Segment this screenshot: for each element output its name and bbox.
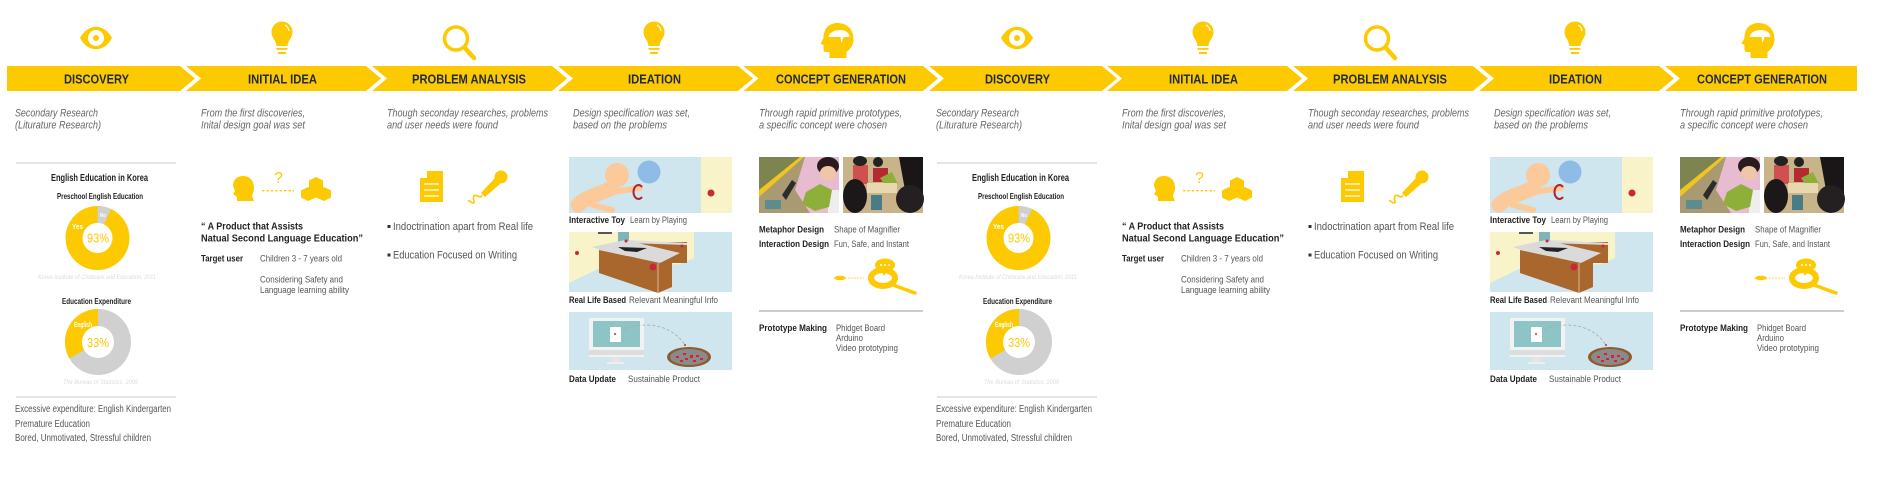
icon: magnifier bbox=[1366, 27, 1395, 58]
intro text: problem analysis bbox=[387, 108, 548, 132]
subheading: preschool English education: Preschool English Education bbox=[57, 191, 143, 201]
label: data update: Sustainable Product bbox=[1549, 374, 1621, 384]
intro text: discovery: (Liturature Research) bbox=[15, 120, 101, 132]
findings list: discovery: Premature Education bbox=[936, 419, 1011, 430]
quote: “ A Product that Assists bbox=[1122, 220, 1224, 232]
panel: discovery bbox=[936, 108, 1097, 444]
target user: Language learning ability bbox=[1181, 285, 1270, 295]
heading: ideation: IDEATION bbox=[1549, 72, 1602, 86]
icon: child question product: ? bbox=[274, 170, 283, 187]
label: real life based: Relevant Meaningful Info bbox=[629, 295, 718, 305]
design details: Shape of Magnifier bbox=[1755, 225, 1821, 235]
intro text: problem analysis: Though seconday researches, problems bbox=[1308, 108, 1469, 120]
process chevron bar bbox=[7, 66, 1857, 91]
intro text: ideation: Design specification was set, bbox=[1494, 108, 1611, 120]
intro text: initial idea: From the first discoveries, bbox=[201, 108, 305, 120]
prototype making: Phidget Board bbox=[1757, 323, 1806, 333]
intro text: concept generation bbox=[1680, 108, 1823, 132]
findings list: discovery: Excessive expenditure: English Kindergarten bbox=[15, 404, 171, 415]
target user bbox=[201, 254, 349, 295]
heading: concept generation: CONCEPT GENERATION bbox=[776, 72, 906, 86]
icon: document and microphone bbox=[1341, 170, 1428, 203]
illustration: kitchen room bbox=[569, 232, 732, 293]
source: preschool: Korea Institute of Childcare and Education, 2011 bbox=[959, 274, 1077, 281]
prototype making bbox=[759, 323, 898, 353]
icon: head concept generation bbox=[820, 23, 854, 58]
subheading: education expenditure: Education Expenditure bbox=[983, 296, 1052, 306]
findings list: discovery: Bored, Unmotivated, Stressful children bbox=[936, 433, 1072, 444]
icon: document and microphone bbox=[420, 170, 508, 203]
photo: children group bbox=[1764, 156, 1845, 213]
design details bbox=[1680, 225, 1830, 249]
intro text: concept generation: Through rapid primitive prototypes, bbox=[759, 108, 902, 120]
label: interactive toy: Interactive Toy bbox=[569, 215, 625, 225]
panel: initial idea bbox=[1122, 108, 1284, 295]
target user bbox=[1122, 254, 1270, 295]
label: interactive toy: Learn by Playing bbox=[1551, 215, 1608, 225]
icon: eye bbox=[80, 27, 112, 49]
label: data update: Data Update bbox=[1490, 374, 1537, 384]
subheading: English education in Korea: English Education in Korea bbox=[972, 172, 1069, 184]
target user: Considering Safety and bbox=[1181, 274, 1264, 284]
intro text: discovery: Secondary Research bbox=[936, 108, 1019, 120]
intro text: initial idea: From the first discoveries, bbox=[1122, 108, 1226, 120]
heading: concept generation: CONCEPT GENERATION bbox=[1697, 72, 1827, 86]
label: real life based: Real Life Based bbox=[569, 295, 626, 305]
subheading: preschool English education: Preschool English Education bbox=[978, 191, 1064, 201]
intro text: problem analysis bbox=[1308, 108, 1469, 132]
heading: problem analysis: PROBLEM ANALYSIS bbox=[1333, 72, 1447, 86]
panel: ideation bbox=[569, 108, 732, 384]
icon: light bulb initial idea bbox=[272, 22, 292, 54]
heading: problem analysis: PROBLEM ANALYSIS bbox=[412, 72, 526, 86]
donut chart: preschool 93%: No bbox=[1021, 213, 1027, 219]
bullet list: problems bbox=[1308, 221, 1454, 262]
donut chart: expenditure 33% bbox=[986, 309, 1052, 375]
illustration: baby with toy bbox=[1490, 157, 1653, 213]
intro text: ideation bbox=[1494, 108, 1611, 132]
photo: child with prototype bbox=[759, 157, 839, 213]
donut chart: expenditure 33%: English bbox=[995, 320, 1013, 329]
subheading: English education in Korea: English Education in Korea bbox=[51, 172, 148, 184]
design details: Interaction Design bbox=[759, 239, 829, 249]
icon: light bulb initial idea bbox=[1192, 22, 1214, 54]
label: interactive toy bbox=[1490, 215, 1608, 225]
source: expenditure: The Bureau of Statistics, 2009 bbox=[63, 379, 138, 386]
icon: light bulb ideation bbox=[1564, 22, 1586, 54]
donut chart: preschool 93%: Yes bbox=[72, 222, 83, 231]
donut chart: expenditure 33%: 33% bbox=[1008, 335, 1030, 350]
prototype making: Prototype Making bbox=[1680, 323, 1748, 333]
icon: child question product: ? bbox=[1195, 170, 1204, 187]
donut chart: expenditure 33%: 33% bbox=[87, 335, 109, 350]
intro text: discovery bbox=[936, 108, 1022, 132]
label: data update: Data Update bbox=[569, 374, 616, 384]
heading: discovery: DISCOVERY bbox=[64, 72, 130, 86]
prototype making: Video prototyping bbox=[1757, 343, 1819, 353]
donut chart: preschool 93% bbox=[66, 206, 130, 270]
donut chart: preschool 93%: 93% bbox=[1008, 230, 1030, 246]
intro text: problem analysis: and user needs were found bbox=[387, 120, 499, 132]
donut chart: expenditure 33% bbox=[65, 309, 131, 375]
label: real life based: Real Life Based bbox=[1490, 295, 1547, 305]
design details: Fun, Safe, and Instant bbox=[834, 239, 909, 249]
intro text: ideation: based on the problems bbox=[1494, 120, 1588, 132]
bullet list: problems: Education Focused on Writing bbox=[1314, 250, 1438, 262]
panel: problem analysis bbox=[1308, 108, 1469, 262]
intro text: discovery bbox=[15, 108, 101, 132]
panel: discovery bbox=[15, 108, 176, 444]
panel: concept generation bbox=[1680, 108, 1845, 353]
findings list: discovery bbox=[15, 404, 171, 444]
label: interactive toy bbox=[569, 215, 687, 225]
bullet list: problems: Indoctrination apart from Real life bbox=[1314, 221, 1454, 233]
intro text: discovery: (Liturature Research) bbox=[936, 120, 1022, 132]
panel: ideation bbox=[1490, 108, 1653, 384]
target user: Considering Safety and bbox=[260, 274, 343, 284]
target user: Language learning ability bbox=[260, 285, 349, 295]
label: real life based bbox=[1490, 295, 1639, 305]
intro text: ideation bbox=[573, 108, 690, 132]
intro text: concept generation: a specific concept were chosen bbox=[1680, 120, 1808, 132]
label: interactive toy: Learn by Playing bbox=[630, 215, 687, 225]
intro text: problem analysis: and user needs were found bbox=[1308, 120, 1420, 132]
design details bbox=[759, 225, 909, 249]
icon: magnifier bbox=[444, 27, 474, 58]
bullet list: problems: Indoctrination apart from Real life bbox=[393, 221, 533, 233]
intro text: initial idea bbox=[1122, 108, 1227, 132]
donut chart: preschool 93%: 93% bbox=[87, 230, 109, 246]
findings list: discovery: Excessive expenditure: English Kindergarten bbox=[936, 404, 1092, 415]
target user: Children 3 - 7 years old bbox=[1181, 254, 1263, 264]
subheading: education expenditure: Education Expenditure bbox=[62, 296, 131, 306]
design details: Metaphor Design bbox=[759, 225, 824, 235]
intro text: ideation: Design specification was set, bbox=[573, 108, 690, 120]
icon: magnifier with speech bubble bbox=[1755, 258, 1836, 293]
prototype making: Prototype Making bbox=[759, 323, 827, 333]
prototype making: Arduino bbox=[836, 333, 863, 343]
intro text: concept generation bbox=[759, 108, 902, 132]
panel: concept generation bbox=[759, 108, 924, 353]
label: data update bbox=[1490, 374, 1621, 384]
donut chart: preschool 93%: No bbox=[100, 213, 106, 219]
quote bbox=[1122, 220, 1284, 245]
intro text: initial idea bbox=[201, 108, 306, 132]
design details: Fun, Safe, and Instant bbox=[1755, 239, 1830, 249]
heading: initial idea: INITIAL IDEA bbox=[1169, 72, 1238, 86]
quote: Natual Second Language Education” bbox=[1122, 233, 1284, 245]
findings list: discovery bbox=[936, 404, 1092, 444]
donut chart: expenditure 33%: English bbox=[74, 320, 92, 329]
icon: child question product bbox=[233, 170, 331, 201]
prototype making bbox=[1680, 323, 1819, 353]
label: data update: Sustainable Product bbox=[628, 374, 700, 384]
label: interactive toy: Interactive Toy bbox=[1490, 215, 1546, 225]
label: real life based bbox=[569, 295, 718, 305]
process group: first series bbox=[15, 22, 924, 444]
icon: magnifier with speech bubble bbox=[834, 258, 915, 293]
icon: head concept generation bbox=[1742, 23, 1774, 58]
photo: child with prototype bbox=[1680, 157, 1760, 213]
prototype making: Video prototyping bbox=[836, 343, 898, 353]
source: preschool: Korea Institute of Childcare and Education, 2011 bbox=[38, 274, 156, 281]
quote bbox=[201, 220, 363, 245]
illustration: baby with toy bbox=[569, 157, 732, 213]
heading: discovery: DISCOVERY bbox=[985, 72, 1051, 86]
icon: child question product bbox=[1154, 170, 1252, 201]
illustration: computer and tray bbox=[1490, 312, 1653, 370]
prototype making: Phidget Board bbox=[836, 323, 885, 333]
process group: second series bbox=[936, 22, 1845, 444]
target user: Children 3 - 7 years old bbox=[260, 254, 342, 264]
quote: Natual Second Language Education” bbox=[201, 233, 363, 245]
label: data update bbox=[569, 374, 700, 384]
panel: initial idea bbox=[201, 108, 363, 295]
target user: Target user bbox=[201, 254, 243, 264]
illustration: kitchen room bbox=[1490, 232, 1653, 293]
intro text: concept generation: a specific concept were chosen bbox=[759, 120, 887, 132]
heading: initial idea: INITIAL IDEA bbox=[248, 72, 317, 86]
design details: Interaction Design bbox=[1680, 239, 1750, 249]
intro text: initial idea: Inital design goal was set bbox=[1122, 120, 1227, 132]
findings list: discovery: Bored, Unmotivated, Stressful children bbox=[15, 433, 151, 444]
intro text: problem analysis: Though seconday researches, problems bbox=[387, 108, 548, 120]
source: expenditure: The Bureau of Statistics, 2009 bbox=[984, 379, 1059, 386]
donut chart: preschool 93% bbox=[986, 206, 1050, 270]
icon: light bulb ideation bbox=[644, 22, 664, 54]
design details: Metaphor Design bbox=[1680, 225, 1745, 235]
target user: Target user bbox=[1122, 254, 1164, 264]
icon: eye bbox=[1001, 27, 1033, 49]
intro text: discovery: Secondary Research bbox=[15, 108, 98, 120]
heading: ideation: IDEATION bbox=[628, 72, 681, 86]
prototype making: Arduino bbox=[1757, 333, 1784, 343]
bullet list: problems: Education Focused on Writing bbox=[393, 250, 517, 262]
donut chart: preschool 93%: Yes bbox=[993, 222, 1004, 231]
design details: Shape of Magnifier bbox=[834, 225, 900, 235]
findings list: discovery: Premature Education bbox=[15, 419, 90, 430]
label: real life based: Relevant Meaningful Info bbox=[1550, 295, 1639, 305]
photo: children group bbox=[843, 156, 924, 213]
quote: “ A Product that Assists bbox=[201, 220, 303, 232]
bullet list: problems bbox=[388, 221, 533, 262]
intro text: ideation: based on the problems bbox=[573, 120, 667, 132]
illustration: computer and tray bbox=[569, 312, 732, 370]
panel: problem analysis bbox=[387, 108, 548, 262]
intro text: initial idea: Inital design goal was set bbox=[201, 120, 306, 132]
intro text: concept generation: Through rapid primitive prototypes, bbox=[1680, 108, 1823, 120]
